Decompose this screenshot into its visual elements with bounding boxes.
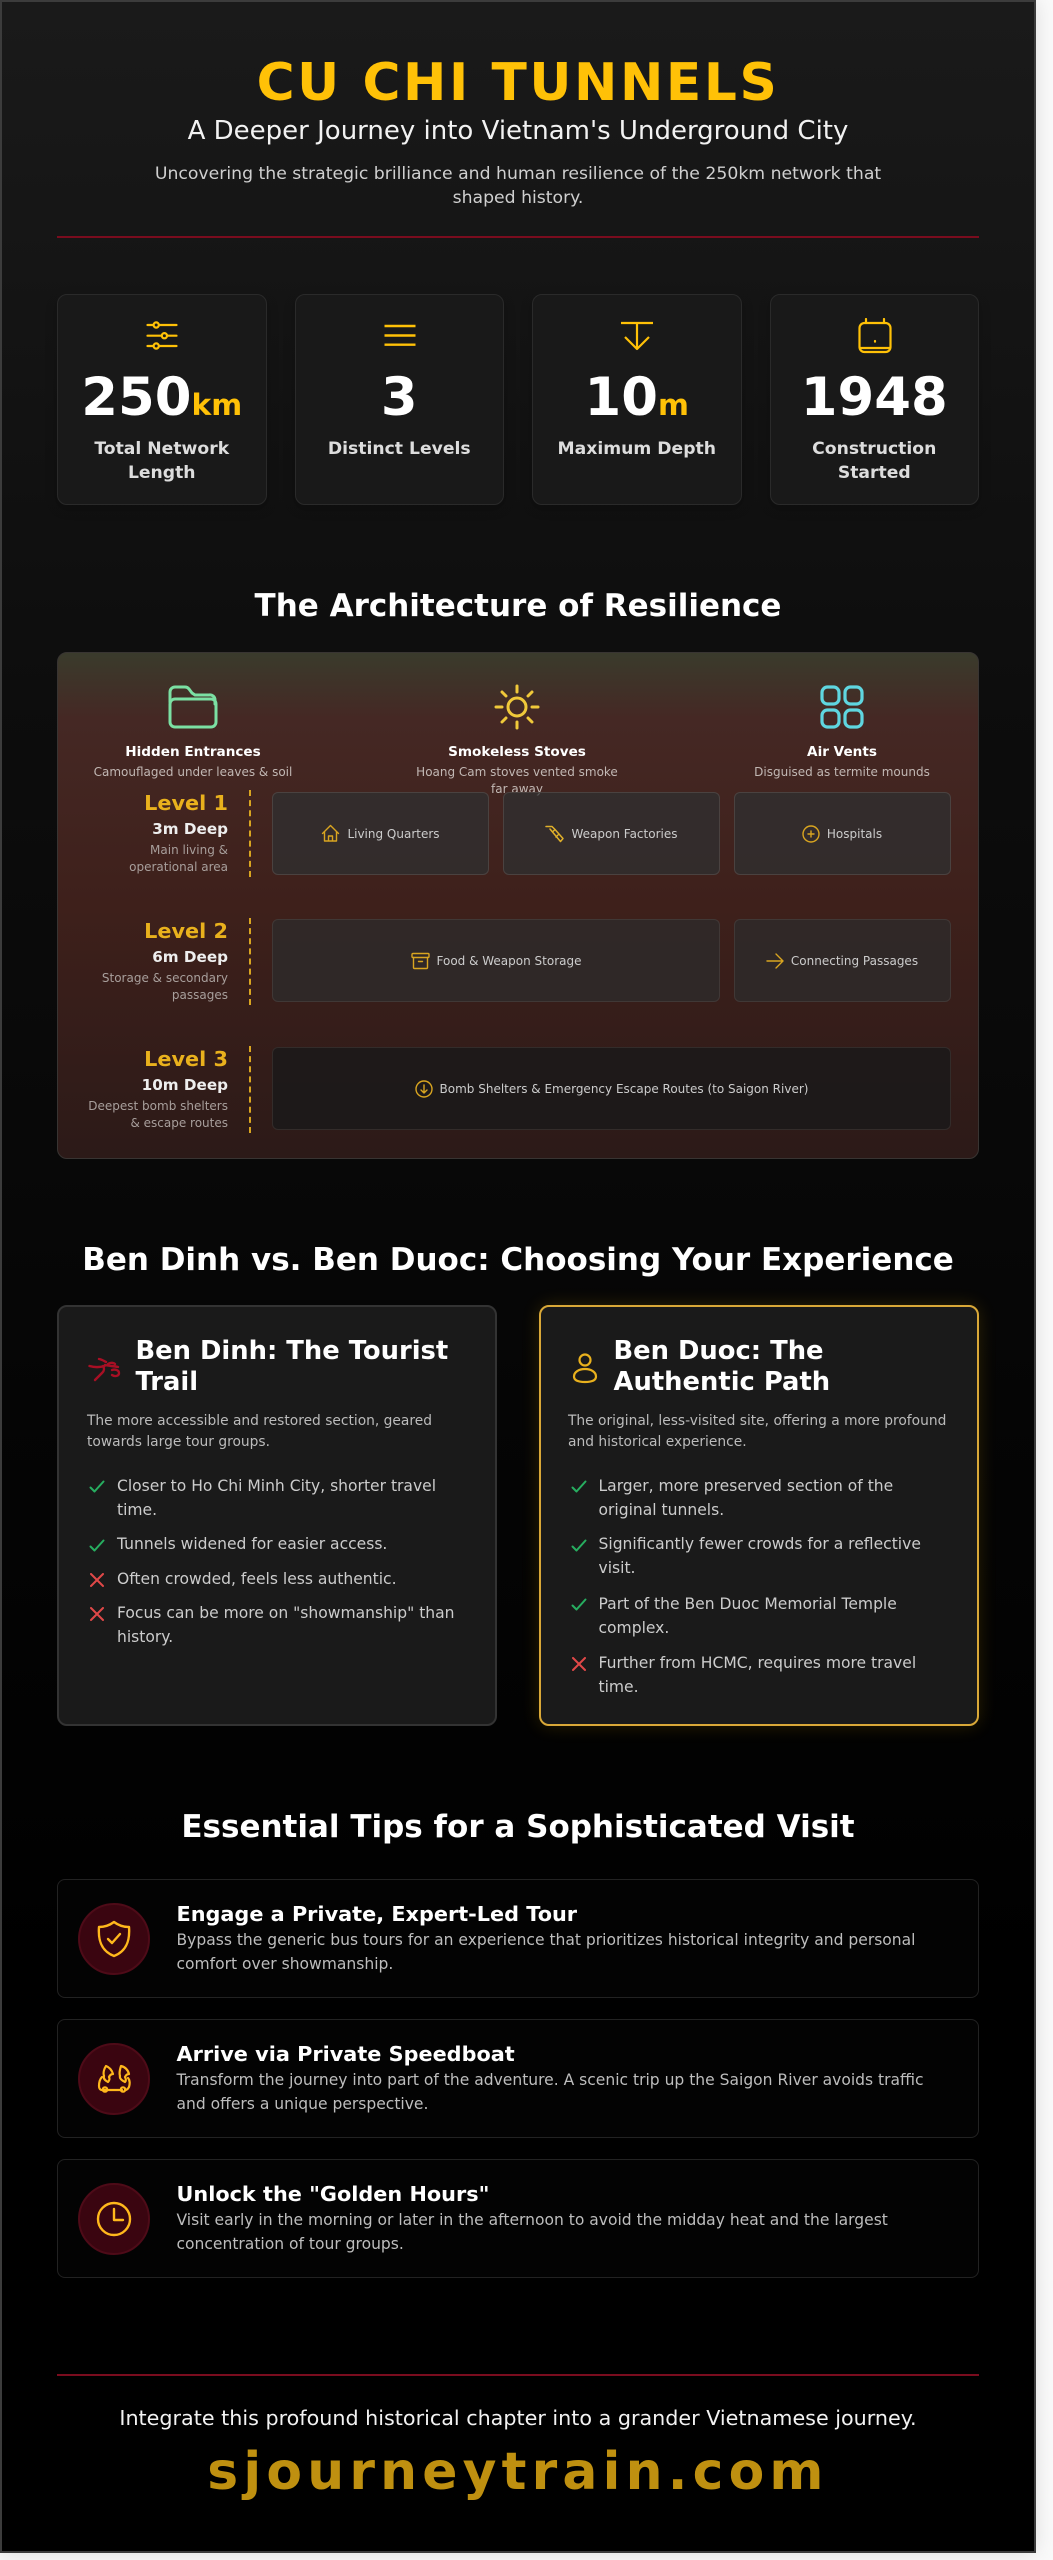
label xyxy=(812,439,936,483)
level name: Level 2 xyxy=(144,919,228,943)
feature text: far away xyxy=(491,782,543,796)
heading: architecture: The Architecture of Resilience xyxy=(255,588,781,624)
room: connecting passages xyxy=(734,919,950,1002)
label: Distinct Levels xyxy=(328,439,471,459)
level description: & escape routes xyxy=(130,1116,228,1130)
panel: tip speedboat xyxy=(57,2019,979,2138)
pro: Tunnels widened for easier access. xyxy=(117,1535,387,1553)
panel: tunnel cross-section diagram xyxy=(57,652,979,1159)
card description xyxy=(86,1413,432,1450)
icon: plus circle xyxy=(802,825,820,843)
tip text: Visit early in the morning or later in the afternoon to avoid the midday heat and the largest xyxy=(176,2210,888,2228)
tip text xyxy=(176,2068,924,2116)
level 3 depth line xyxy=(249,1046,251,1133)
level 1 depth line xyxy=(249,790,251,877)
level 2 depth line xyxy=(249,918,251,1005)
panel: tip golden hours xyxy=(57,2159,979,2278)
card description: The original, less-visited site, offering a more profound xyxy=(568,1413,946,1429)
pro: time. xyxy=(117,1500,157,1518)
tip title: Unlock the "Golden Hours" xyxy=(176,2182,489,2206)
level description: Main living & xyxy=(150,842,228,856)
tip text xyxy=(176,1928,916,1976)
icon: archive box xyxy=(411,952,430,970)
icon: three lines xyxy=(384,324,416,346)
panel: stat maximum depth xyxy=(532,294,742,505)
con: time. xyxy=(598,1678,639,1696)
panel: stat distinct levels xyxy=(294,294,504,505)
room: weapon factories: Weapon Factories xyxy=(572,826,677,840)
con xyxy=(117,1604,455,1646)
pro xyxy=(117,1476,436,1518)
feature text: Camouflaged under leaves & soil xyxy=(94,765,292,779)
footer call to action: Integrate this profound historical chapter into a grander Vietnamese journey. xyxy=(119,2406,917,2430)
pro: Larger, more preserved section of the xyxy=(598,1476,893,1494)
con: Focus can be more on "showmanship" than xyxy=(117,1604,455,1622)
level depth: 6m Deep xyxy=(152,948,228,966)
icon: check xyxy=(571,1598,587,1611)
subtitle: A Deeper Journey into Vietnam's Underground City xyxy=(188,116,848,146)
footer divider xyxy=(57,2374,979,2376)
tip title: Engage a Private, Expert-Led Tour xyxy=(176,1902,577,1926)
room: bomb shelters xyxy=(272,1047,951,1130)
icon: sliders xyxy=(146,321,178,350)
card title: Ben Duoc: The xyxy=(614,1336,824,1366)
card description: towards large tour groups. xyxy=(87,1434,270,1450)
room: connecting passages: Connecting Passages xyxy=(791,954,918,968)
icon: folder xyxy=(168,686,218,728)
room: hospitals xyxy=(734,792,950,875)
card title: Authentic Path xyxy=(614,1367,830,1397)
panel: Ben Dinh card xyxy=(57,1305,497,1726)
pro: complex. xyxy=(598,1619,669,1637)
label: Maximum Depth xyxy=(558,439,716,459)
surface feature: smokeless stoves xyxy=(416,684,618,796)
icon: check xyxy=(90,1480,104,1492)
level description: Deepest bomb shelters xyxy=(88,1098,228,1112)
con xyxy=(598,1651,916,1699)
level 2 label xyxy=(102,919,228,1002)
icon: check xyxy=(571,1539,587,1552)
panel: stat total network length xyxy=(57,294,266,505)
level description xyxy=(129,842,228,874)
icon: check xyxy=(571,1480,587,1493)
icon: home xyxy=(322,824,340,842)
icon: check xyxy=(90,1540,104,1552)
heading: comparison: Ben Dinh vs. Ben Duoc: Choosing Your Experience xyxy=(82,1242,954,1278)
tip text: Bypass the generic bus tours for an experience that prioritizes historical integrity and personal xyxy=(176,1930,916,1948)
label: Construction xyxy=(812,439,936,459)
feature title: Air Vents xyxy=(807,744,877,760)
feature title: Smokeless Stoves xyxy=(448,744,586,760)
tip text: and offers a unique perspective. xyxy=(176,2094,428,2112)
title: CU CHI TUNNELS xyxy=(257,53,779,113)
value: 1948 xyxy=(801,367,948,428)
room: living quarters: Living Quarters xyxy=(347,826,440,840)
icon: shield check xyxy=(78,1903,150,1975)
level depth: 3m Deep xyxy=(152,820,228,838)
room: food and weapon storage xyxy=(272,919,720,1002)
card title: Trail xyxy=(136,1367,198,1397)
level 3 label xyxy=(88,1047,228,1130)
pro: visit. xyxy=(598,1559,635,1577)
icon: arrow down to depth xyxy=(621,322,653,350)
pro xyxy=(598,1532,921,1580)
surface feature: air vents xyxy=(754,685,930,779)
room: bomb shelters: Bomb Shelters & Emergency Escape Routes (to Saigon River) xyxy=(440,1082,808,1096)
icon: tool xyxy=(545,826,564,842)
tip text xyxy=(176,2208,888,2256)
room: food and weapon storage: Food & Weapon Storage xyxy=(436,954,582,968)
level description xyxy=(88,1098,228,1130)
icon: cross xyxy=(90,1573,104,1587)
label xyxy=(94,439,230,483)
icon: clock xyxy=(78,2183,150,2255)
level name: Level 1 xyxy=(144,791,228,815)
level 1 label xyxy=(129,791,228,874)
footer brand: sjourneytrain.com xyxy=(207,2442,829,2502)
panel: Ben Duoc card xyxy=(539,1305,979,1726)
card title xyxy=(614,1336,830,1397)
value: 3 xyxy=(381,367,418,428)
pro xyxy=(598,1592,897,1640)
feature text: Disguised as termite mounds xyxy=(754,765,930,779)
icon: four vents xyxy=(820,685,864,729)
feature text: Hoang Cam stoves vented smoke xyxy=(416,765,618,779)
panel: stat construction started xyxy=(770,294,979,505)
label: Total Network xyxy=(94,439,229,459)
room: living quarters xyxy=(272,792,489,875)
level name: Level 3 xyxy=(144,1047,228,1071)
card title: Ben Dinh: The Tourist xyxy=(136,1336,448,1366)
feature text xyxy=(416,765,618,796)
pro: Part of the Ben Duoc Memorial Temple xyxy=(598,1595,897,1613)
level description: Storage & secondary xyxy=(102,970,228,984)
icon: tourist trail xyxy=(88,1358,120,1382)
con: history. xyxy=(117,1628,173,1646)
level depth: 10m Deep xyxy=(142,1076,228,1094)
pro: original tunnels. xyxy=(598,1500,724,1518)
heading: tips: Essential Tips for a Sophisticated Visit xyxy=(181,1809,855,1845)
icon: person xyxy=(572,1353,598,1384)
con: Further from HCMC, requires more travel xyxy=(598,1654,916,1672)
card description: The more accessible and restored section, geared xyxy=(87,1413,432,1429)
con: Often crowded, feels less authentic. xyxy=(117,1570,397,1588)
icon: arrow right xyxy=(766,953,784,969)
feature title: Hidden Entrances xyxy=(125,744,261,760)
tip text: comfort over showmanship. xyxy=(176,1954,393,1972)
tip text: concentration of tour groups. xyxy=(176,2234,404,2252)
icon: speedboat xyxy=(78,2043,150,2115)
level description: passages xyxy=(172,988,228,1002)
icon: sun xyxy=(494,684,540,730)
room: weapon factories xyxy=(502,792,720,875)
card description xyxy=(568,1413,946,1450)
label: Length xyxy=(128,463,196,483)
room: hospitals: Hospitals xyxy=(827,826,882,840)
surface feature: hidden entrances xyxy=(94,686,292,779)
value: 250km xyxy=(81,367,242,428)
panel: tip private tour xyxy=(57,1879,979,1998)
header divider xyxy=(57,236,979,238)
pro: Closer to Ho Chi Minh City, shorter travel xyxy=(117,1476,436,1494)
level description: operational area xyxy=(129,860,228,874)
tip text: Transform the journey into part of the adventure. A scenic trip up the Saigon River avoids traffic xyxy=(176,2070,924,2088)
card description: and historical experience. xyxy=(568,1434,747,1450)
tip title: Arrive via Private Speedboat xyxy=(176,2042,515,2066)
icon: cross xyxy=(90,1607,104,1621)
icon: calendar xyxy=(858,318,892,354)
level description xyxy=(102,970,228,1002)
label: Started xyxy=(838,463,911,483)
card title xyxy=(136,1336,448,1397)
tagline: shaped history. xyxy=(453,188,583,208)
tagline: Uncovering the strategic brilliance and human resilience of the 250km network that xyxy=(155,164,881,184)
pro: Significantly fewer crowds for a reflective xyxy=(598,1535,921,1553)
icon: cross xyxy=(572,1657,586,1671)
pro xyxy=(598,1474,893,1522)
icon: arrow down circle xyxy=(415,1080,433,1098)
tagline xyxy=(155,164,881,208)
value: 10m xyxy=(585,367,689,428)
